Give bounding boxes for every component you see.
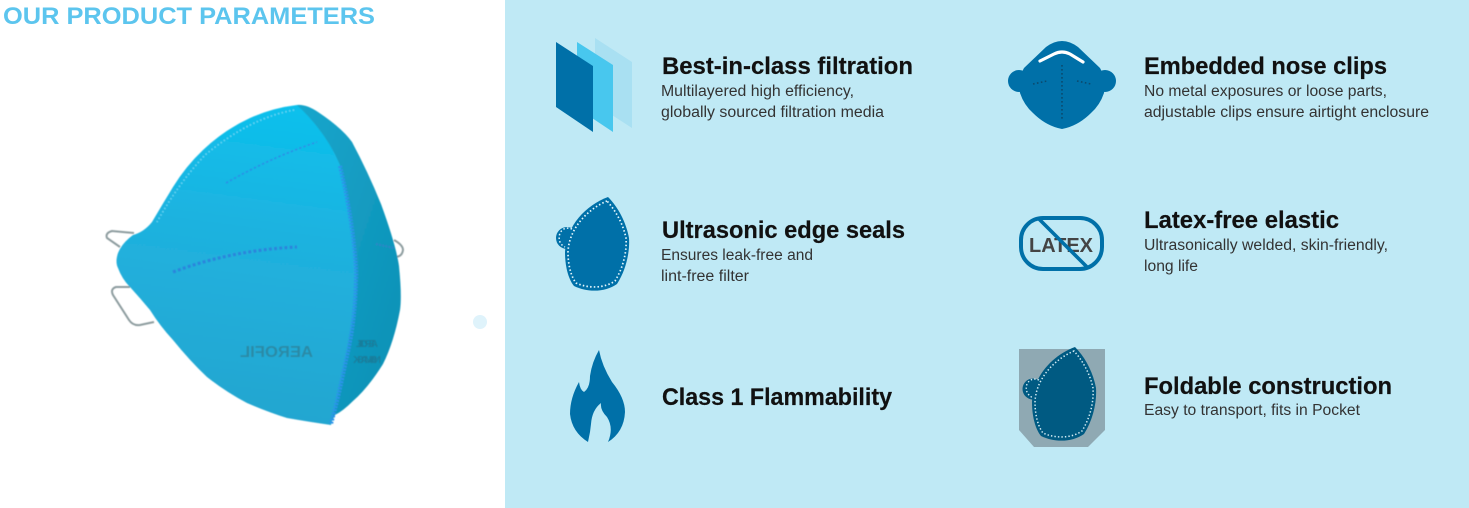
icon: filter layers [556,38,632,132]
title: OUR PRODUCT PARAMETERS [3,3,375,30]
icon: crossed-out latex [1021,218,1102,269]
nose line stitching [173,247,297,272]
heading: Ultrasonic edge seals [662,217,905,244]
icon: flame [570,350,625,442]
description: Easy to transport, fits in Pocket [1144,402,1361,419]
icon: folded mask in pocket [1019,347,1105,447]
description: adjustable clips ensure airtight enclosure [1144,104,1429,121]
heading: Foldable construction [1144,373,1392,400]
description: Multilayered high efficiency, [661,83,854,100]
feature: filtration [556,38,913,132]
ear loops [107,231,403,325]
feature: edge seals [556,197,905,291]
feature: latex free [1021,207,1388,275]
back panel stitching [376,244,394,248]
heading: Best-in-class filtration [662,53,913,80]
illustration: blue face mask [107,105,403,425]
description: long life [1144,258,1198,275]
brand mark: AEROFIL [240,344,313,361]
feature: foldable [1019,347,1392,447]
description: lint-free filter [661,268,749,285]
back panel [297,105,401,425]
heading: Latex-free elastic [1144,207,1339,234]
heading: Embedded nose clips [1144,53,1387,80]
decorative dot [473,315,487,329]
icon: mask with nose clip [1008,41,1116,129]
heading: Class 1 Flammability [662,384,893,411]
side print [352,339,381,366]
description [1144,237,1388,275]
description: Ensures leak-free and [661,247,813,264]
side print: AEROFIL [356,339,378,350]
description: globally sourced filtration media [661,104,884,121]
feature: nose clips [1008,41,1429,129]
description [1144,83,1429,121]
panel: product features [505,0,1469,508]
description: No metal exposures or loose parts, [1144,83,1387,100]
centre seam [331,166,356,424]
description [661,83,884,121]
front panel [116,105,356,425]
icon: crossed-out latex: LATEX [1029,235,1094,257]
description [661,247,813,285]
edge seal dots [157,110,294,222]
upper fold stitching [226,142,317,183]
icon: sealed mask shape [556,197,629,291]
description: Ultrasonically welded, skin-friendly, [1144,237,1388,254]
side print: N95 MASK [352,355,381,366]
feature: flammability [570,350,893,442]
